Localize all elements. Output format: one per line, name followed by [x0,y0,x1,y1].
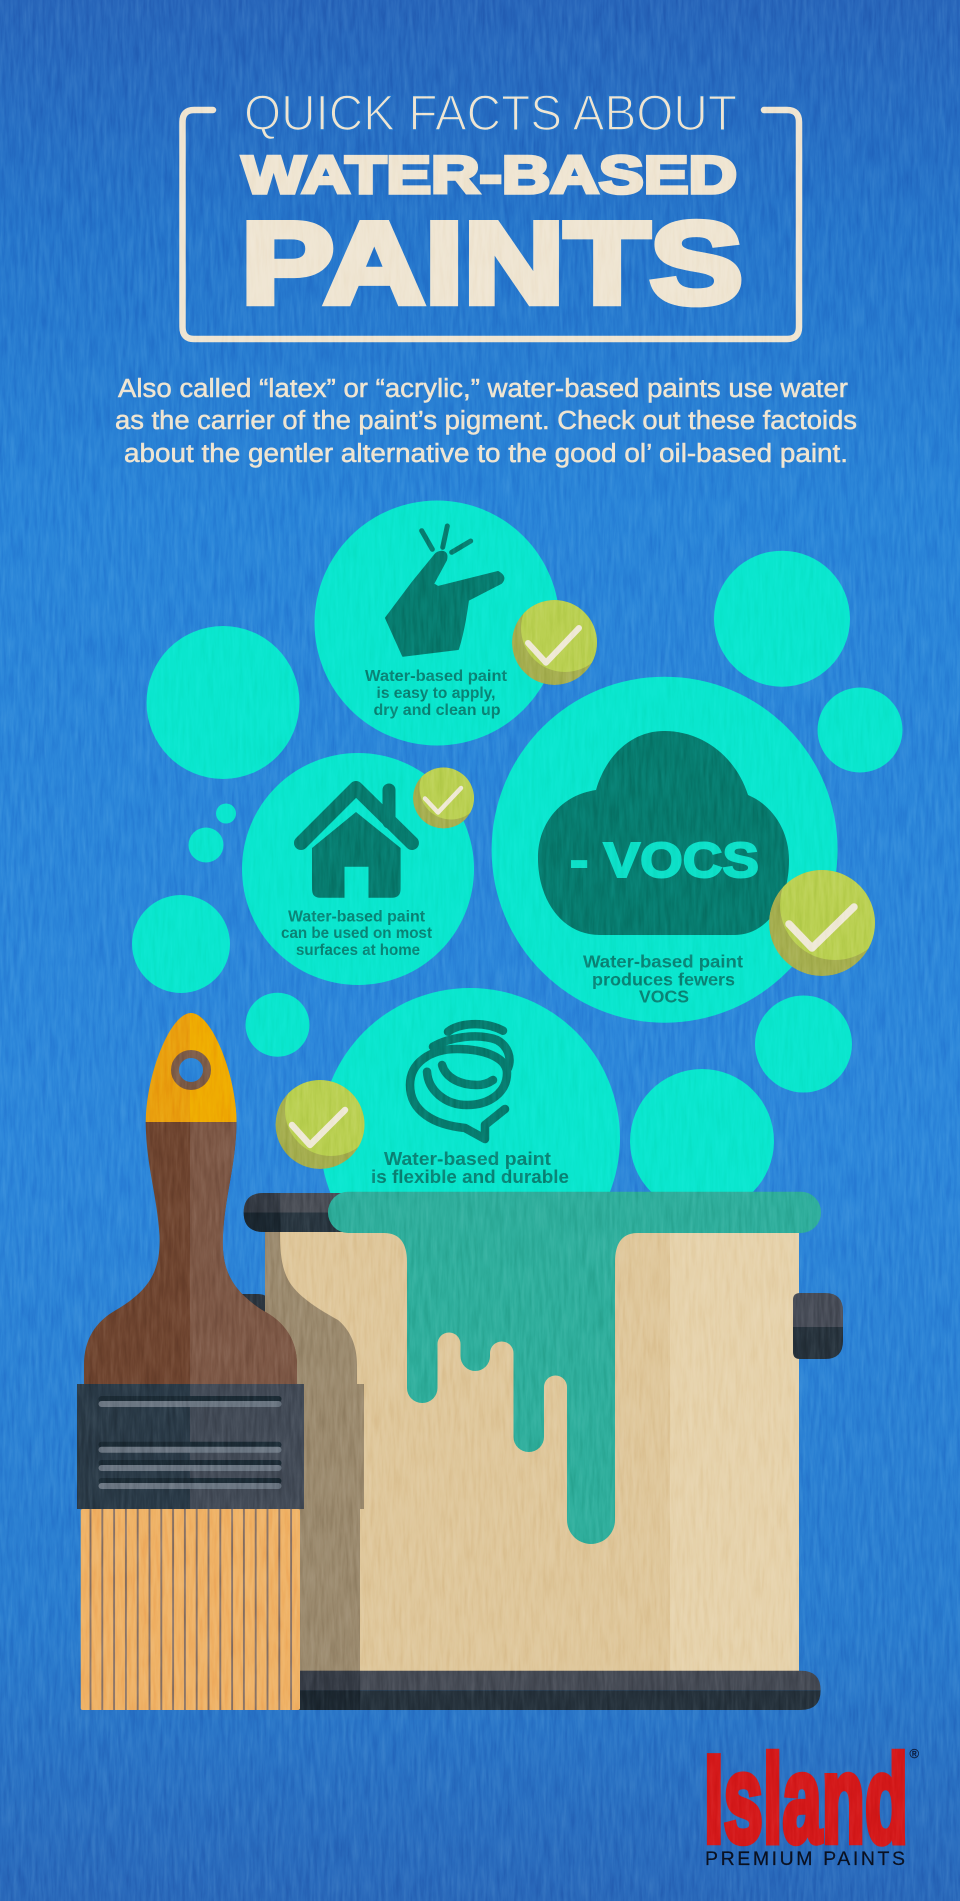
can body [265,1230,799,1671]
intro paragraph [115,375,857,468]
caption [371,1149,569,1187]
icon: house [301,788,412,898]
icon: check badge [769,870,875,976]
paint drip [328,1192,821,1544]
cloud label: - VOCS [570,834,759,888]
caption: can be used on most [281,925,432,942]
intro paragraph: as the carrier of the paint’s pigment. Check out these factoids [115,407,857,435]
caption: Water-based paint [365,668,507,685]
bubble: easy to apply [314,500,609,746]
registered mark: ® [910,1746,920,1761]
title frame [182,110,799,339]
can top rim [244,1193,345,1232]
caption: surfaces at home [296,942,420,959]
brush shadow on can [265,1232,364,1710]
can highlight panel [670,1230,799,1671]
can base rim [280,1671,821,1710]
title [241,85,743,328]
icon: check badge [512,600,597,685]
icon: spiral speech bubble [410,1024,510,1139]
logo [704,1731,920,1870]
paint brush [77,1013,304,1710]
right handle [793,1293,843,1359]
bristles [81,1509,300,1710]
handle tip [146,1013,236,1122]
caption: Water-based paint [384,1149,551,1169]
caption: dry and clean up [374,702,500,719]
caption [365,668,507,719]
icon: cloud [538,731,789,935]
icon: check badge [413,768,474,828]
icon: snapping hand [386,526,503,656]
handle [84,1122,297,1384]
title line: quick facts about: QUICK FACTS ABOUT [244,85,737,141]
left handle [236,1294,271,1360]
decorative bubbles [132,551,902,1213]
title line: water-based: WATER-BASED [242,146,737,205]
caption: is easy to apply, [376,685,496,702]
caption: Water-based paint [583,952,743,972]
caption: Water-based paint [288,909,425,926]
paint can [236,1192,843,1710]
logo tagline: PREMIUM PAINTS [705,1848,905,1870]
bubble: fewer VOCs [492,677,890,1023]
caption [281,909,432,959]
handle highlight [190,1122,297,1384]
intro paragraph: Also called “latex” or “acrylic,” water-based paints use water [118,375,849,403]
icon: check badge [276,1080,364,1169]
title line: paints: PAINTS [241,198,743,328]
bubble: flexible and durable [276,988,620,1193]
handle tip highlight [190,1013,236,1122]
caption: VOCS [639,987,689,1007]
intro paragraph: about the gentler alternative to the good ol’ oil-based paint. [124,440,848,468]
caption: produces fewers [592,970,735,990]
ferrule [77,1384,304,1509]
caption: is flexible and durable [371,1167,569,1187]
bubble: most surfaces [242,753,482,985]
hanging hole [175,1054,207,1086]
caption [583,952,743,1007]
